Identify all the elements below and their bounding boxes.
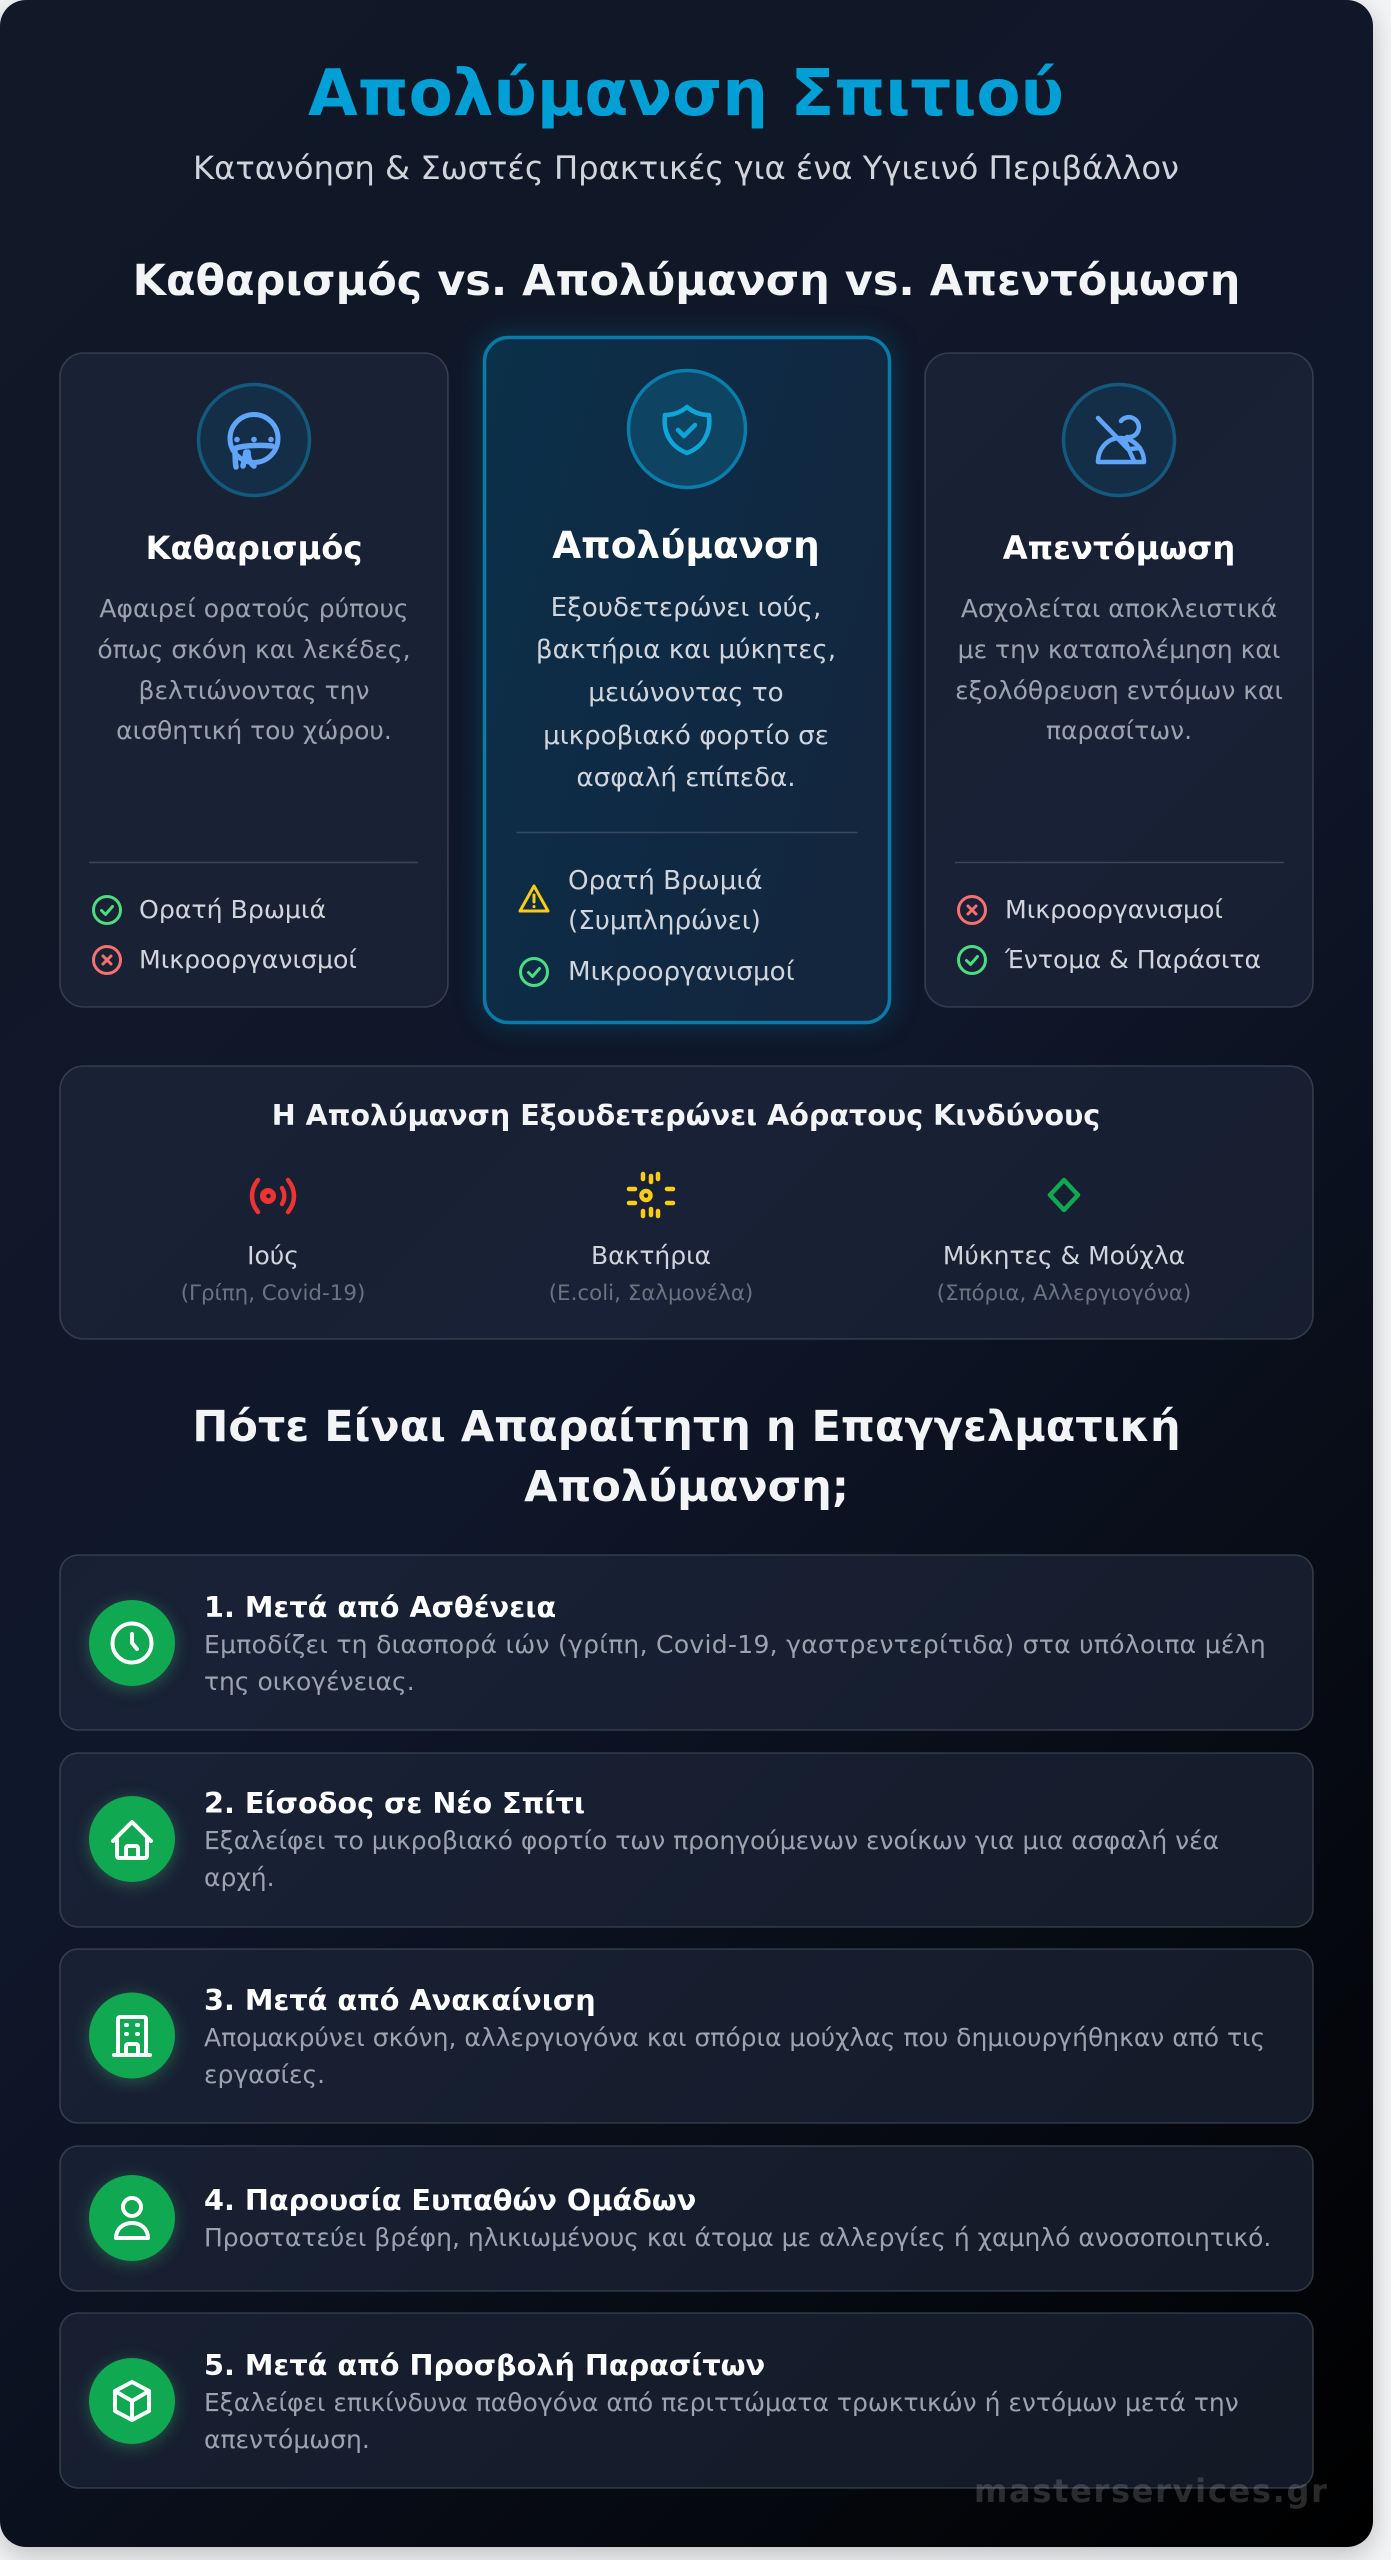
panel: item 4: 4. Παρουσία Ευπαθών Ομάδων: [204, 2183, 696, 2217]
threat: fungi: (Σπόρια, Αλλεργιογόνα): [937, 1281, 1191, 1306]
list: visible dirt partial: (Συμπληρώνει): [568, 906, 761, 936]
list: insects yes: Έντομα & Παράσιτα: [1004, 945, 1261, 974]
card description: βελτιώνοντας την: [139, 676, 369, 705]
card description: παρασίτων.: [1046, 716, 1192, 745]
panel: item 2: Εξαλείφει το μικροβιακό φορτίο των προηγούμενων ενοίκων για μια ασφαλή νέα: [204, 1826, 1219, 1855]
card description: εξολόθρευση εντόμων και: [955, 676, 1283, 705]
card description: όπως σκόνη και λεκέδες,: [97, 635, 411, 664]
panel: invisible threats: [60, 1066, 1313, 1339]
subtitle: Κατανόηση & Σωστές Πρακτικές για ένα Υγιεινό Περιβάλλον: [193, 149, 1179, 187]
list: microorganisms no: Μικροοργανισμοί: [1005, 895, 1223, 924]
panel: item 4: Προστατεύει βρέφη, ηλικιωμένους και άτομα με αλλεργίες ή χαμηλό ανοσοποιητικό.: [204, 2223, 1271, 2252]
panel: item 1: [60, 1555, 1313, 1730]
card description: [536, 593, 836, 793]
threat: bacteria: Βακτήρια: [591, 1241, 711, 1270]
card description: με την καταπολέμηση και: [958, 635, 1280, 664]
panel: disinfection card: [484, 338, 890, 1022]
icon: clock: [89, 1600, 175, 1686]
card description: βακτήρια και μύκητες,: [536, 635, 836, 665]
threat: bacteria: (E.coli, Σαλμονέλα): [549, 1281, 753, 1306]
threat: viruses: (Γρίπη, Covid-19): [181, 1281, 365, 1306]
icon: face mask: [198, 384, 310, 496]
card description: αισθητική του χώρου.: [116, 716, 392, 745]
threat: viruses: [181, 1180, 365, 1306]
watermark: masterservices.gr: [974, 2472, 1329, 2510]
threat: fungi: Μύκητες & Μούχλα: [943, 1241, 1185, 1270]
icon: cube: [89, 2358, 175, 2444]
icon: house: [89, 1796, 175, 1882]
panel: item 4: [60, 2146, 1313, 2291]
icon: building: [89, 1992, 175, 2078]
panel heading: Η Απολύμανση Εξουδετερώνει Αόρατους Κινδύνους: [272, 1098, 1100, 1132]
threat: fungi: [937, 1180, 1191, 1306]
icon: person: [89, 2175, 175, 2261]
title: Απολύμανση Σπιτιού: [308, 56, 1064, 131]
panel: item 3: εργασίες.: [204, 2060, 325, 2089]
icon: virus: [252, 1180, 294, 1212]
icon: shield check: [628, 370, 746, 488]
panel: item 3: Απομακρύνει σκόνη, αλλεργιογόνα και σπόρια μούχλας που δημιουργήθηκαν από τις: [204, 2023, 1265, 2052]
list: visible dirt partial: Ορατή Βρωμιά: [568, 866, 762, 896]
card title: Απολύμανση: [552, 523, 820, 567]
panel: item 3: [60, 1949, 1313, 2123]
card description: Ασχολείται αποκλειστικά: [961, 594, 1277, 623]
panel: item 5: απεντόμωση.: [204, 2425, 370, 2454]
heading: when professional: [192, 1402, 1181, 1512]
list: microorganisms yes: Μικροοργανισμοί: [568, 957, 795, 987]
card description: ασφαλή επίπεδα.: [576, 763, 796, 793]
card description: Αφαιρεί ορατούς ρύπους: [99, 594, 409, 623]
card description: Εξουδετερώνει ιούς,: [551, 593, 821, 623]
panel: item 5: 5. Μετά από Προσβολή Παρασίτων: [204, 2348, 765, 2382]
icon: fungi diamond: [1050, 1180, 1078, 1210]
panel: item 2: αρχή.: [204, 1863, 275, 1892]
card description: μειώνοντας το: [588, 678, 784, 708]
panel: item 5: [60, 2313, 1313, 2488]
heading: when professional: Απολύμανση;: [524, 1462, 849, 1512]
icon: insect strike: [1064, 384, 1174, 496]
heading: comparison: Καθαρισμός vs. Απολύμανση vs. Απεντόμωση: [133, 256, 1240, 306]
card description: [955, 594, 1283, 745]
list: visible dirt yes: Ορατή Βρωμιά: [139, 895, 326, 924]
panel: cleaning card: [60, 353, 448, 1007]
list: microorganisms no: Μικροοργανισμοί: [139, 945, 357, 974]
panel: item 2: [60, 1753, 1313, 1927]
heading: when professional: Πότε Είναι Απαραίτητη η Επαγγελματική: [192, 1402, 1181, 1452]
panel: pest control card: [925, 353, 1313, 1007]
icon: bacteria: [629, 1174, 673, 1216]
panel: item 1: Εμποδίζει τη διασπορά ιών (γρίπη, Covid-19, γαστρεντερίτιδα) στα υπόλοιπα μέλη: [204, 1630, 1266, 1659]
card title: Απεντόμωση: [1003, 529, 1235, 567]
card description: [97, 594, 411, 745]
list: visible dirt partial: [520, 866, 762, 936]
panel: item 2: 2. Είσοδος σε Νέο Σπίτι: [204, 1786, 585, 1820]
card title: Καθαρισμός: [146, 529, 362, 567]
card description: μικροβιακό φορτίο σε: [543, 721, 829, 751]
panel: item 3: 3. Μετά από Ανακαίνιση: [204, 1983, 596, 2017]
panel: item 1: της οικογένειας.: [204, 1667, 415, 1696]
panel: item 1: 1. Μετά από Ασθένεια: [204, 1590, 556, 1624]
threat: viruses: Ιούς: [247, 1241, 299, 1270]
threat: bacteria: [549, 1174, 753, 1306]
panel: item 5: Εξαλείφει επικίνδυνα παθογόνα από περιττώματα τρωκτικών ή εντόμων μετά την: [204, 2388, 1239, 2417]
